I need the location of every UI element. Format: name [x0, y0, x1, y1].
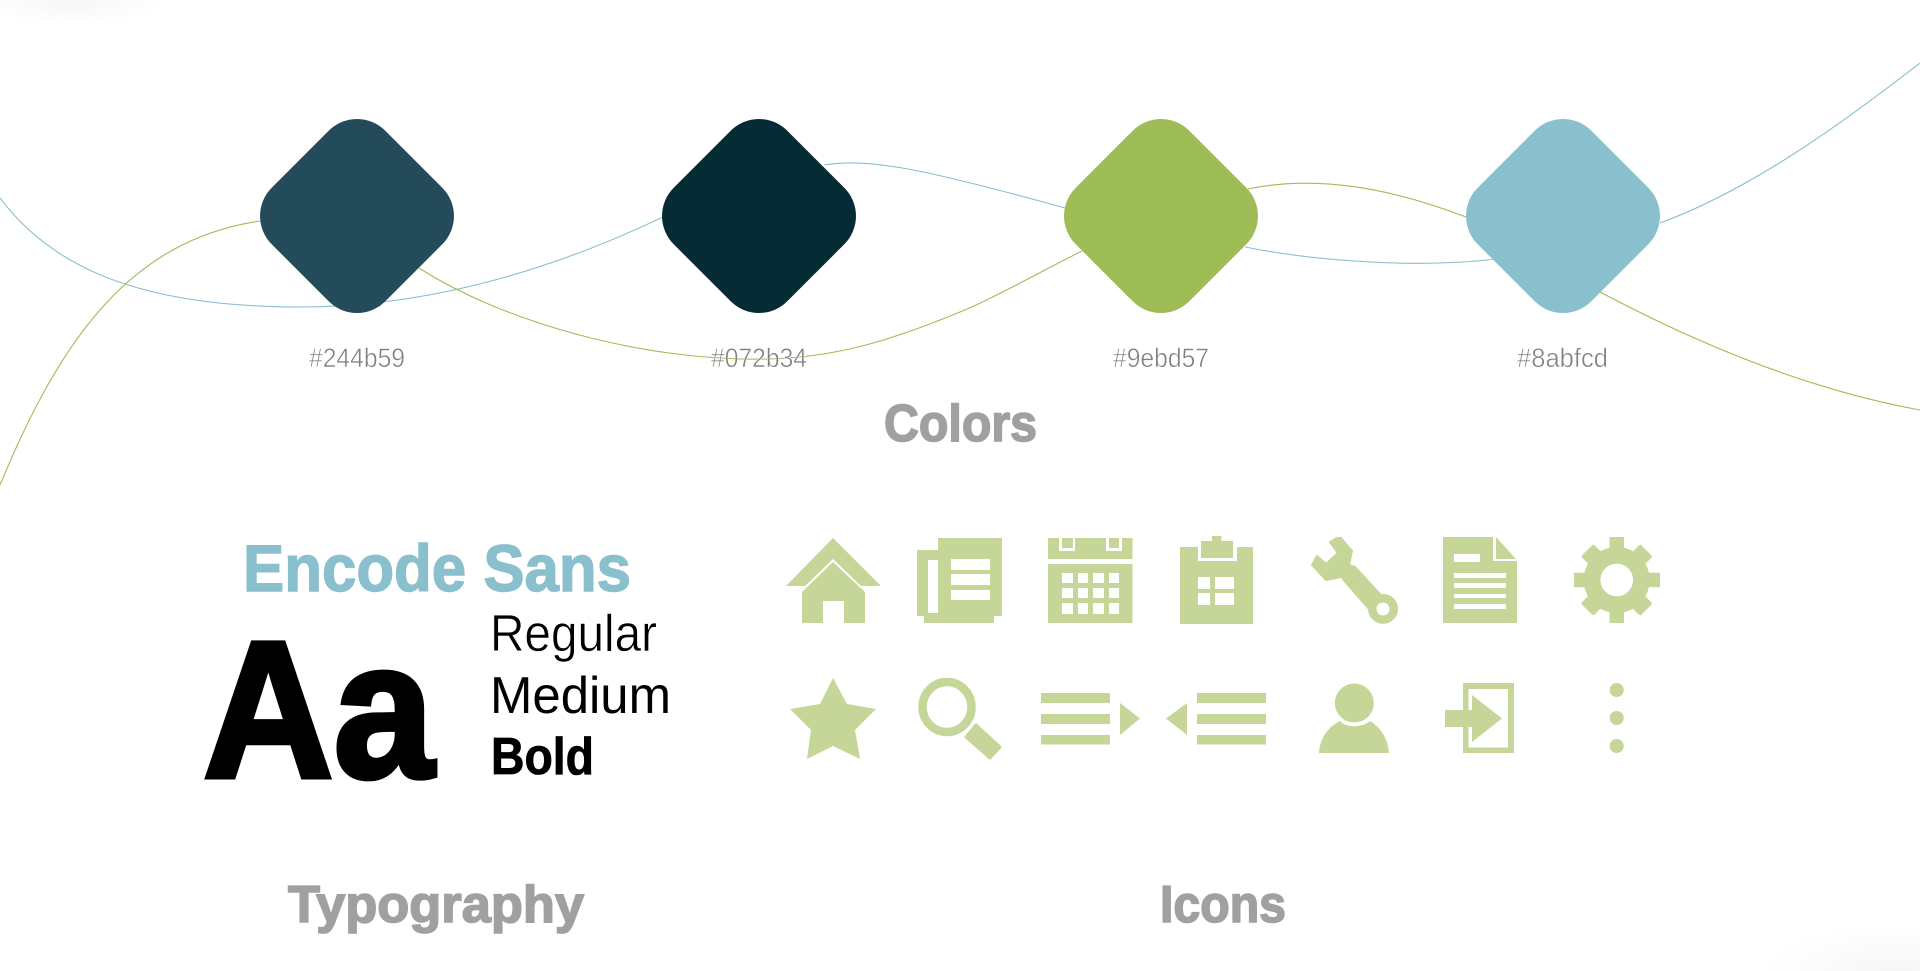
icon: menu collapse right [1041, 693, 1140, 744]
icon: more dots [1610, 683, 1624, 753]
icon: gear [1574, 537, 1660, 623]
connecting curves [0, 63, 1920, 485]
icon: calendar [1048, 538, 1132, 623]
weight: Bold: Bold [491, 728, 594, 786]
swatch: #072b34 [645, 102, 873, 330]
icon: wrench [1312, 538, 1397, 623]
label: #244b59: #244b59 [309, 343, 405, 373]
icon: sign in [1445, 683, 1514, 753]
weight: Medium: Medium [490, 667, 671, 725]
icons grid [786, 536, 1660, 759]
swatch: #8abfcd [1449, 102, 1677, 330]
heading: Icons: Icons [1160, 876, 1286, 934]
icon: home [786, 538, 881, 623]
weight: Regular: Regular [490, 605, 657, 663]
label: #8abfcd: #8abfcd [1517, 343, 1608, 373]
swatch: #244b59 [243, 102, 471, 330]
heading: Colors: Colors [884, 395, 1037, 453]
specimen: Aa: Aa [203, 601, 435, 819]
label: #9ebd57: #9ebd57 [1113, 343, 1209, 373]
font name: Encode Sans: Encode Sans [243, 531, 631, 605]
heading: Typography: Typography [288, 876, 584, 934]
icon: star [790, 678, 876, 759]
icon: user [1319, 684, 1389, 753]
label: #072b34: #072b34 [711, 343, 807, 373]
icon: search [922, 682, 1000, 758]
swatch: #9ebd57 [1047, 102, 1275, 330]
icon: clipboard [1180, 536, 1253, 624]
icon: document [1443, 537, 1517, 623]
icon: newspaper [917, 538, 1002, 623]
icon: menu collapse left [1166, 693, 1266, 744]
